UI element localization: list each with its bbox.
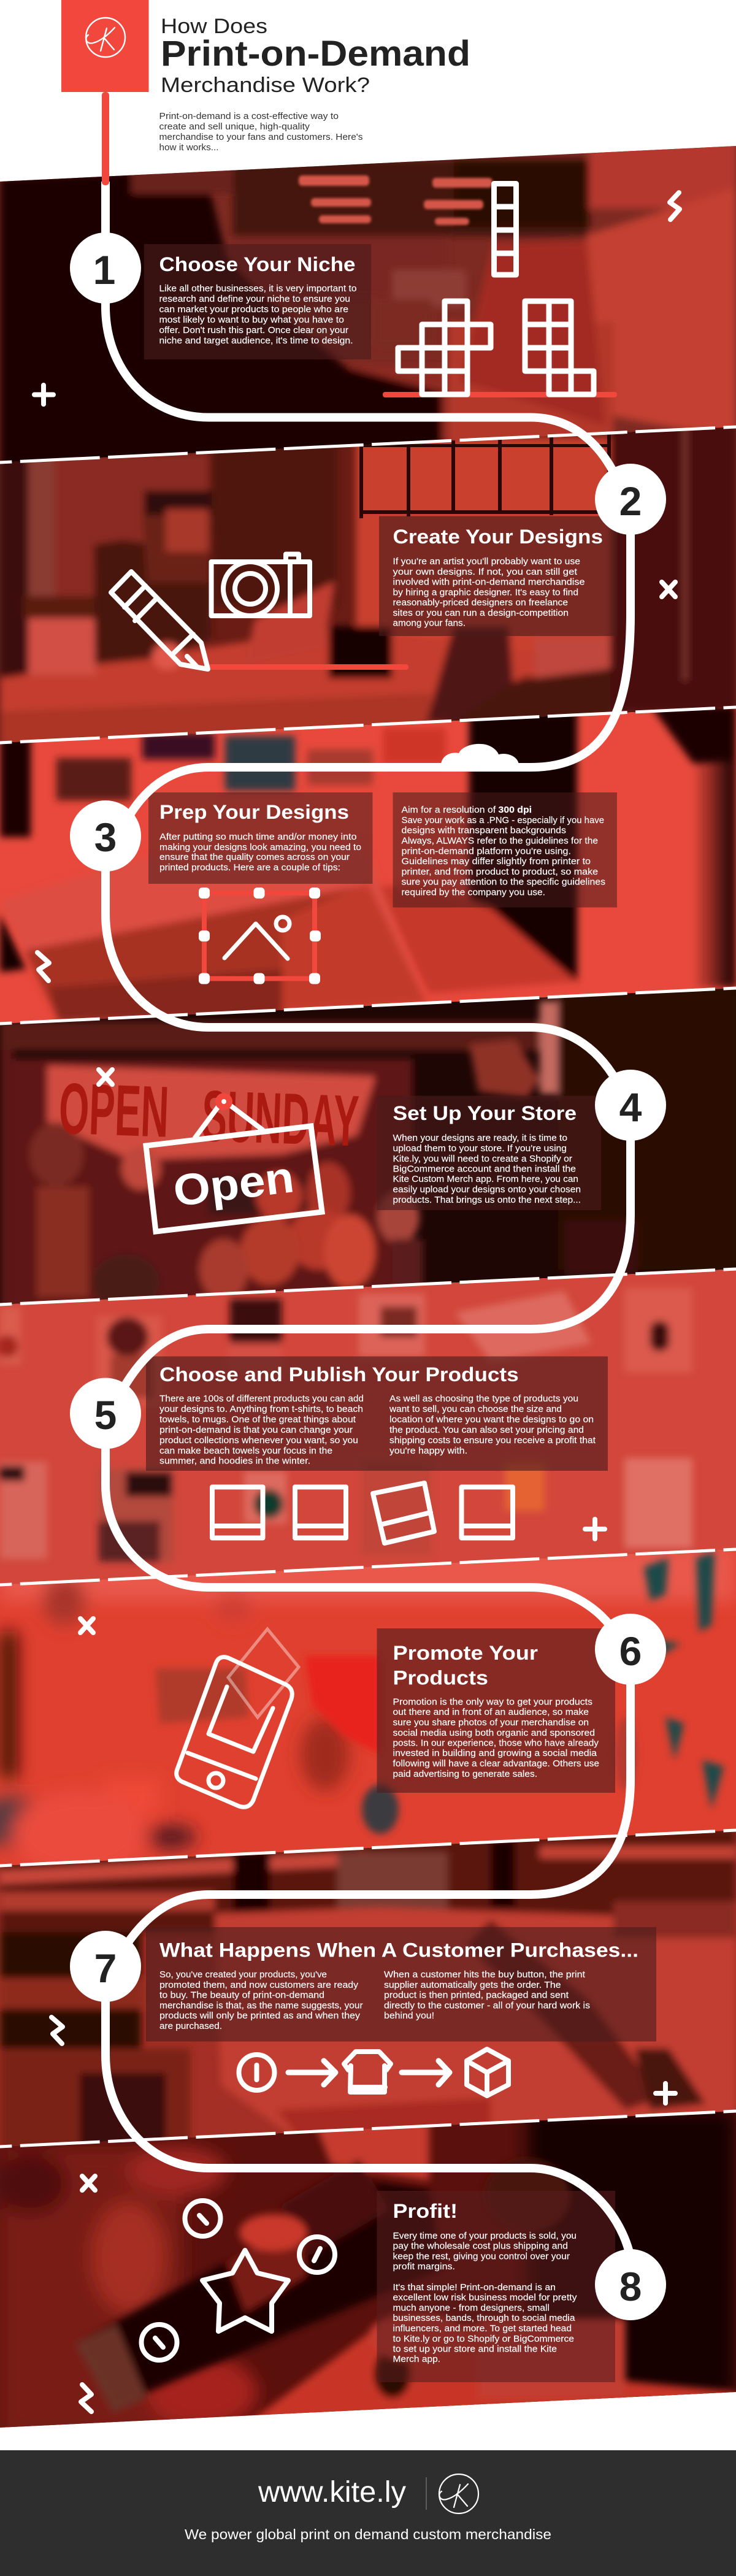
body text: Promotion is the only way to get your products [393, 1698, 592, 1708]
photo: record shop [0, 141, 736, 472]
step number markers [70, 232, 666, 2320]
step 7: 7 [94, 1945, 117, 1991]
step 1: 1 [93, 247, 115, 293]
body text: following will have a clear advantage. Others use [393, 1759, 599, 1769]
photo: printing press [0, 1828, 736, 2153]
panel: step 2 create your designs [0, 423, 736, 751]
text box right [393, 792, 617, 908]
icons: order to product to parcel flow [239, 2049, 508, 2096]
body text [393, 2231, 577, 2364]
tips text [401, 805, 605, 898]
heading: Choose Your Niche [159, 253, 356, 275]
photo: hand with cigar [0, 2110, 736, 2435]
body text: If you're an artist you'll probably want to use [393, 557, 580, 567]
body text right: behind you! [384, 2011, 434, 2021]
body text right [384, 1970, 590, 2021]
body text right: you're happy with. [389, 1446, 467, 1456]
body text [159, 832, 361, 873]
body text left [159, 1970, 363, 2031]
body text: niche and target audience, it's time to design. [159, 336, 353, 346]
body text: can market your products to people who are [159, 305, 348, 315]
step 7 [70, 1931, 141, 2002]
tips text: Save your work as a .PNG - especially if you have [401, 816, 604, 826]
panel: step 8 profit [0, 2110, 736, 2435]
body text [159, 284, 357, 346]
body text right: As well as choosing the type of products you [389, 1394, 578, 1404]
text box left [148, 792, 373, 884]
photo: holding a print [0, 699, 736, 1030]
body text [393, 1133, 581, 1205]
intro text: create and sell unique, high-quality [159, 122, 310, 132]
body text [393, 557, 585, 628]
step 8 [595, 2249, 666, 2320]
body text right: shipping costs to ensure you receive a profit that [389, 1436, 596, 1446]
step 3: 3 [94, 815, 117, 860]
panel: step 5 choose and publish your products [0, 1263, 736, 1589]
body text: pay the wholesale cost plus shipping and [393, 2241, 568, 2251]
text box [144, 244, 371, 359]
body text: It's that simple! Print-on-demand is an [393, 2283, 556, 2293]
body text: keep the rest, giving you control over your [393, 2252, 570, 2262]
body text left: There are 100s of different products you can add [159, 1394, 364, 1404]
decoration: zigzag [37, 953, 49, 981]
body text right: When a customer hits the buy button, the print [384, 1970, 585, 1980]
body text: BigCommerce account and then install the [393, 1164, 576, 1174]
step 1 [70, 232, 141, 304]
panel: step 4 set up your store [0, 987, 736, 1313]
photo: designer at desk [0, 423, 736, 751]
heading: What Happens When A Customer Purchases... [159, 1939, 638, 1961]
tips text: Aim for a resolution of 300 dpi [401, 805, 532, 815]
body text: much anyone - from designers, small [393, 2304, 550, 2313]
body text: to set up your store and install the Kite [393, 2344, 557, 2354]
body text right: supplier automatically gets the order. The [384, 1980, 561, 1990]
tips text: Always, ALWAYS refer to the guidelines for the [401, 837, 598, 846]
step 6 [595, 1614, 666, 1685]
body text: ensure that the quality comes across on your [159, 853, 350, 862]
panel: step 3 prep your designs [0, 699, 736, 1030]
decoration: cross [662, 582, 675, 597]
title: How Does [161, 15, 267, 38]
icon: phone with image [177, 1629, 299, 1807]
decoration: plus [585, 1519, 605, 1539]
body text left: to buy. The beauty of print-on-demand [159, 1991, 324, 2001]
icon: image in selection frame [199, 887, 321, 984]
heading: Choose and Publish Your Products [159, 1363, 519, 1386]
body text: Merch app. [393, 2355, 440, 2364]
icon: tetris blocks [383, 184, 617, 397]
title: Merchandise Work? [161, 74, 370, 97]
step 8: 8 [619, 2264, 642, 2309]
body text right: the product. You can also set your pricing and [389, 1425, 584, 1435]
heading: Products [393, 1667, 488, 1689]
journey path line [105, 182, 631, 2257]
heading: Profit! [393, 2200, 458, 2222]
photo: open sunday suitcase [0, 987, 736, 1313]
body text left: So, you've created your products, you've [159, 1970, 327, 1980]
body text: most likely to want to buy what you have to [159, 315, 344, 325]
icon: camera [211, 554, 310, 616]
body text left: are purchased. [159, 2022, 222, 2031]
tips text: printer, and from product to product, so make [401, 867, 598, 877]
body text: making your designs look amazing, you need to [159, 843, 361, 853]
tips text: sure you pay attention to the specific guidelines [401, 877, 605, 887]
body text: reasonably-priced designers on freelance [393, 598, 568, 608]
step 3 [70, 800, 141, 872]
photo: open sunday suitcase: OPEN [58, 1068, 170, 1153]
body text: social media using both organic and sponsored [393, 1728, 595, 1738]
body text: paid advertising to generate sales. [393, 1769, 537, 1779]
decoration: plus [656, 2083, 675, 2103]
step 2 [595, 464, 666, 535]
text box [146, 1357, 608, 1471]
body text: sure you share photos of your merchandise on [393, 1718, 589, 1728]
body text left: products will only be printed as and when they [159, 2011, 361, 2021]
tips text: Guidelines may differ slightly from printer to [401, 857, 591, 867]
body text left [159, 1394, 364, 1466]
text box [377, 1628, 615, 1793]
text box [379, 516, 618, 636]
body text left: your designs to. Anything from t-shirts, to beach [159, 1405, 363, 1414]
body text: excellent low risk business model for pretty [393, 2293, 577, 2302]
header [61, 0, 470, 153]
dashed section dividers [0, 423, 736, 2150]
step 6: 6 [619, 1628, 642, 1674]
title [161, 15, 470, 97]
panel: step 1 choose your niche [0, 141, 736, 472]
red start of path [102, 92, 109, 185]
body text: businesses, bands, through to social media [393, 2313, 575, 2323]
body text left: summer, and hoodies in the winter. [159, 1456, 310, 1466]
body text: out there and in front of an audience, so make [393, 1708, 589, 1717]
intro text: Print-on-demand is a cost-effective way to [159, 112, 339, 121]
footer [0, 2450, 736, 2576]
heading: Prep Your Designs [159, 801, 349, 823]
body text: profit margins. [393, 2262, 455, 2272]
tips text: designs with transparent backgrounds [401, 826, 566, 835]
tagline: We power global print on demand custom merchandise [185, 2526, 551, 2542]
panel: step 6 promote your products [0, 1546, 736, 1877]
icon: open sign: Open [171, 1152, 297, 1216]
body text right: location of where you want the designs to go on [389, 1415, 594, 1425]
body text: influencers, and more. To get started head [393, 2324, 572, 2334]
decoration: cross [99, 1070, 112, 1084]
body text: easily upload your designs onto your chosen [393, 1185, 581, 1195]
body text right [389, 1394, 596, 1456]
heading [393, 1642, 538, 1689]
body text: Every time one of your products is sold, you [393, 2231, 577, 2241]
text box [146, 1927, 656, 2041]
body text: upload them to your store. If you're using [393, 1144, 567, 1154]
step 2: 2 [619, 478, 642, 524]
icon: open sign [146, 1093, 322, 1232]
text box [377, 1095, 601, 1210]
decoration: cross [80, 1619, 93, 1633]
body text left: merchandise is that, as the name suggests, your [159, 2001, 363, 2011]
body text: After putting so much time and/or money into [159, 832, 357, 842]
body text: involved with print-on-demand merchandise [393, 578, 585, 588]
logo block [61, 0, 148, 92]
body text: sites or you can run a design-competition [393, 608, 569, 618]
body text right: want to sell, you can choose the size and [389, 1405, 562, 1414]
text box [377, 2191, 615, 2382]
intro text: how it works... [159, 143, 218, 153]
icon: pencil [111, 572, 408, 670]
logo [439, 2474, 478, 2513]
heading: Set Up Your Store [393, 1102, 577, 1124]
body text: to Kite.ly or go to Shopify or BigCommerce [393, 2334, 574, 2344]
intro text: merchandise to your fans and customers. Here's [159, 132, 363, 142]
body text: invested in building and growing a social media [393, 1749, 597, 1758]
body text left: can make beach towels your focus in the [159, 1446, 332, 1456]
decoration: zigzag [81, 2385, 91, 2412]
photo: women with phones [0, 1546, 736, 1877]
intro text [159, 112, 363, 153]
body text right: directly to the customer - all of your hard work is [384, 2001, 590, 2011]
body text right: product is then printed, packaged and sent [384, 1991, 569, 2001]
heading: Promote Your [393, 1642, 538, 1664]
body text: products. That brings us onto the next step... [393, 1195, 581, 1205]
body text: by hiring a graphic designer. It's easy to find [393, 588, 578, 597]
body text: your own designs. If not, you can still get [393, 567, 577, 577]
body text left: product collections whenever you want, so you [159, 1436, 358, 1446]
body text: When your designs are ready, it is time to [393, 1133, 567, 1143]
body text: Like all other businesses, it is very important to [159, 284, 357, 294]
icon: star with coins [141, 2201, 335, 2360]
photo: open sunday suitcase: SUNDAY [201, 1076, 360, 1162]
icon: cloud on path [441, 744, 519, 765]
body text [393, 1698, 599, 1779]
decoration: cross [82, 2176, 95, 2190]
body text left: towels, to mugs. One of the great things about [159, 1415, 356, 1425]
decoration: zigzag [670, 193, 680, 220]
step 5: 5 [94, 1392, 117, 1438]
tips text: print-on-demand platform you're using. [401, 846, 571, 856]
body text: posts. In our experience, those who have already [393, 1738, 599, 1748]
title: Print-on-Demand [161, 34, 470, 74]
body text: research and define your niche to ensure you [159, 294, 350, 304]
website url: www.kite.ly [258, 2476, 406, 2509]
icons: product frames [212, 1483, 513, 1543]
body text: among your fans. [393, 618, 466, 628]
step 4 [595, 1070, 666, 1141]
body text left: promoted them, and now customers are ready [159, 1980, 359, 1990]
decoration: plus [34, 385, 53, 404]
body text: printed products. Here are a couple of tips: [159, 863, 340, 873]
body text: offer. Don't rush this part. Once clear on your [159, 326, 348, 335]
decoration: zigzag [52, 2017, 63, 2044]
photo: wall of magazines [0, 1263, 736, 1589]
panel: step 7 what happens when a customer purchases [0, 1828, 736, 2153]
body text: Kite.ly, you will need to create a Shopify or [393, 1154, 572, 1164]
step 5 [70, 1378, 141, 1449]
heading: Create Your Designs [393, 526, 603, 548]
step 4: 4 [619, 1084, 642, 1130]
body text left: print-on-demand is that you can change your [159, 1425, 353, 1435]
body text: Kite Custom Merch app. From here, you can [393, 1175, 578, 1184]
tips text: required by the company you use. [401, 888, 545, 898]
